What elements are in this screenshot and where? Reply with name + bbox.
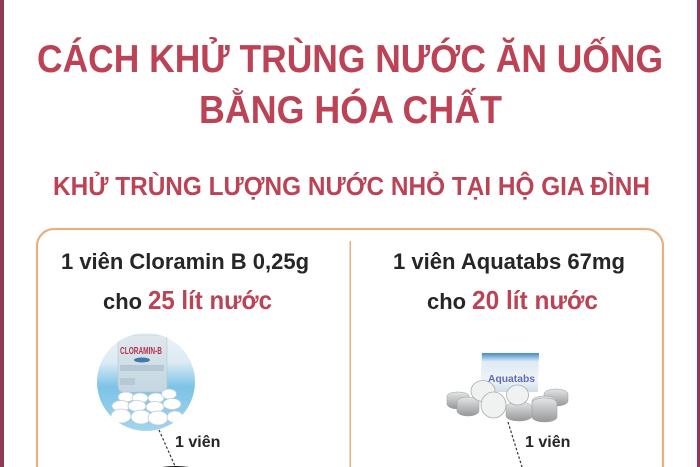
left 1 viên label: 1 viên <box>175 434 220 451</box>
panel: dosage comparison <box>37 229 663 467</box>
title <box>37 36 663 132</box>
icon: Cloramin-B jar and tablets <box>97 333 195 431</box>
icon: water container top <box>142 466 208 467</box>
left dosage text: cho <box>103 289 142 314</box>
left dosage text <box>61 249 309 315</box>
icon: Aquatabs packet and tablets: Aquatabs <box>488 374 535 385</box>
left dashed leader <box>159 430 175 466</box>
subtitle: KHỬ TRÙNG LƯỢNG NƯỚC NHỎ TẠI HỘ GIA ĐÌNH <box>53 170 650 201</box>
title: BẰNG HÓA CHẤT <box>199 88 502 132</box>
right dashed leader <box>508 422 522 467</box>
right 1 viên label: 1 viên <box>525 434 570 451</box>
icon: Aquatabs packet and tablets <box>447 353 568 422</box>
left dosage text: 25 lít nước <box>148 285 272 315</box>
icon: Cloramin-B jar and tablets: CLORAMIN-B <box>120 346 162 357</box>
left dosage text: 1 viên Cloramin B 0,25g <box>61 249 309 274</box>
right dosage text: 20 lít nước <box>472 285 598 315</box>
right side bar <box>697 0 700 467</box>
left side bar <box>0 0 4 467</box>
right dosage text <box>393 249 625 315</box>
right dosage text: cho <box>427 289 466 314</box>
right dosage text: 1 viên Aquatabs 67mg <box>393 249 625 274</box>
